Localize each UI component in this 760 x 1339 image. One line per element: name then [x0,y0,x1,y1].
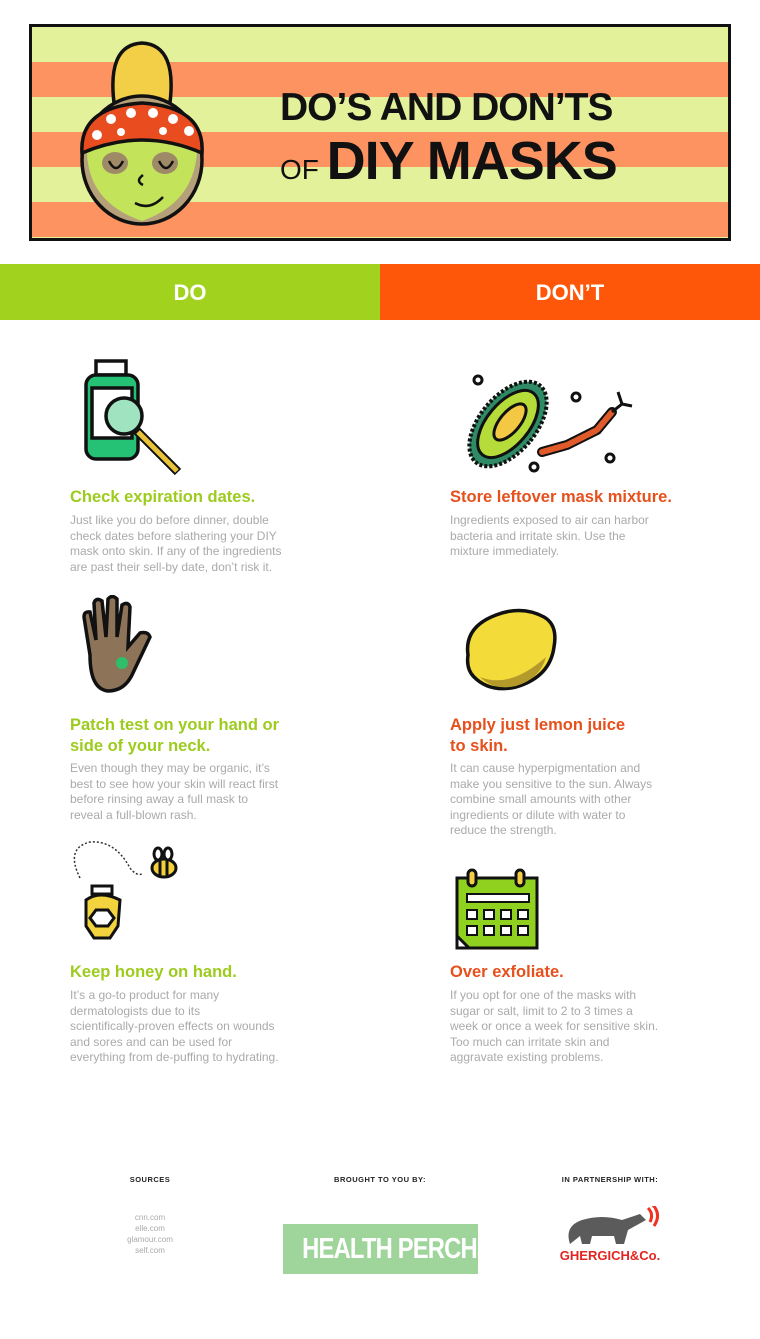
item: lemon juice: reduce the strength. [450,823,557,837]
footer: brought to you by: BROUGHT TO YOU BY: [334,1175,426,1184]
item: check expiration [70,488,281,574]
icon: bottle with magnifier [84,359,182,476]
item: check expiration: Check expiration dates. [70,488,255,506]
item: patch test: Even though they may be organic, it’s [70,761,270,775]
item: check expiration: mask onto skin. If any of the ingredients [70,544,281,558]
item: store leftover: mixture immediately. [450,544,559,558]
item: patch test: best to see how your skin will react first [70,777,278,791]
icon: lemon [466,608,557,690]
DON'T header: DON’T [536,280,604,305]
footer: sources [127,1175,173,1255]
item: store leftover [450,488,672,558]
DON'T header [380,264,760,320]
item: patch test [70,716,279,822]
item: over exfoliate: sugar or salt, limit to 2 to 3 times a [450,1004,633,1018]
item: lemon juice [450,716,652,837]
footer: partnership: IN PARTNERSHIP WITH: [562,1175,658,1184]
icon: honey and bee [74,841,178,940]
item: honey: everything from de-puffing to hydrating. [70,1050,279,1064]
item: over exfoliate: week or once a week for sensitive skin. [450,1019,658,1033]
item: lemon juice: Apply just lemon juice [450,716,625,734]
item: honey [70,963,279,1064]
item: over exfoliate: If you opt for one of the masks with [450,988,636,1002]
item: patch test: reveal a full-blown rash. [70,808,197,822]
item: lemon juice: to skin. [450,737,508,755]
item: store leftover: bacteria and irritate skin. Use the [450,529,625,543]
item: lemon juice: It can cause hyperpigmentation and [450,761,640,775]
DO header [0,264,380,320]
item: honey: and sores and can be used for [70,1035,232,1049]
icon: bacteria [467,374,632,472]
footer: sources: elle.com [135,1224,165,1233]
footer: brought to you by: HEALTH PERCH [302,1233,477,1265]
header banner: OF DIY MASKS [280,131,617,191]
item: lemon juice: ingredients or dilute with water to [450,808,625,822]
item: honey: dermatologists due to its [70,1004,200,1018]
item: honey: Keep honey on hand. [70,963,237,981]
item: over exfoliate: Over exfoliate. [450,963,564,981]
item: honey: scientifically-proven effects on wounds [70,1019,275,1033]
header banner [29,24,731,241]
footer: sources: cnn.com [135,1213,165,1222]
item: check expiration: Just like you do before dinner, double [70,513,269,527]
title: DO’S AND DON’TS [280,86,612,129]
icon: mask face [80,41,204,226]
footer: sources: glamour.com [127,1235,173,1244]
item: patch test: before rinsing away a full mask to [70,792,248,806]
item: patch test: side of your neck. [70,737,210,755]
item: over exfoliate [450,963,658,1064]
icon: calendar [456,868,538,950]
item: patch test: Patch test on your hand or [70,716,279,734]
item: honey: It’s a go-to product for many [70,988,219,1002]
footer: partnership [560,1175,660,1263]
DO header: DO [174,280,206,305]
footer: sources: self.com [135,1246,165,1255]
item: lemon juice: combine small amounts with other [450,792,631,806]
footer: sources: SOURCES [130,1175,170,1184]
item: over exfoliate: Too much can irritate skin and [450,1035,609,1049]
item: lemon juice: make you sensitive to the sun. Always [450,777,652,791]
item: check expiration: check dates before slathering your DIY [70,529,277,543]
icon: hand [82,595,152,693]
item: store leftover: Ingredients exposed to air can harbor [450,513,649,527]
footer: partnership: GHERGICH&Co. [560,1248,660,1263]
footer: brought to you by [283,1175,478,1274]
item: check expiration: are past their sell-by date, don’t risk it. [70,560,272,574]
item: over exfoliate: aggravate existing problems. [450,1050,603,1064]
item: store leftover: Store leftover mask mixture. [450,488,672,506]
